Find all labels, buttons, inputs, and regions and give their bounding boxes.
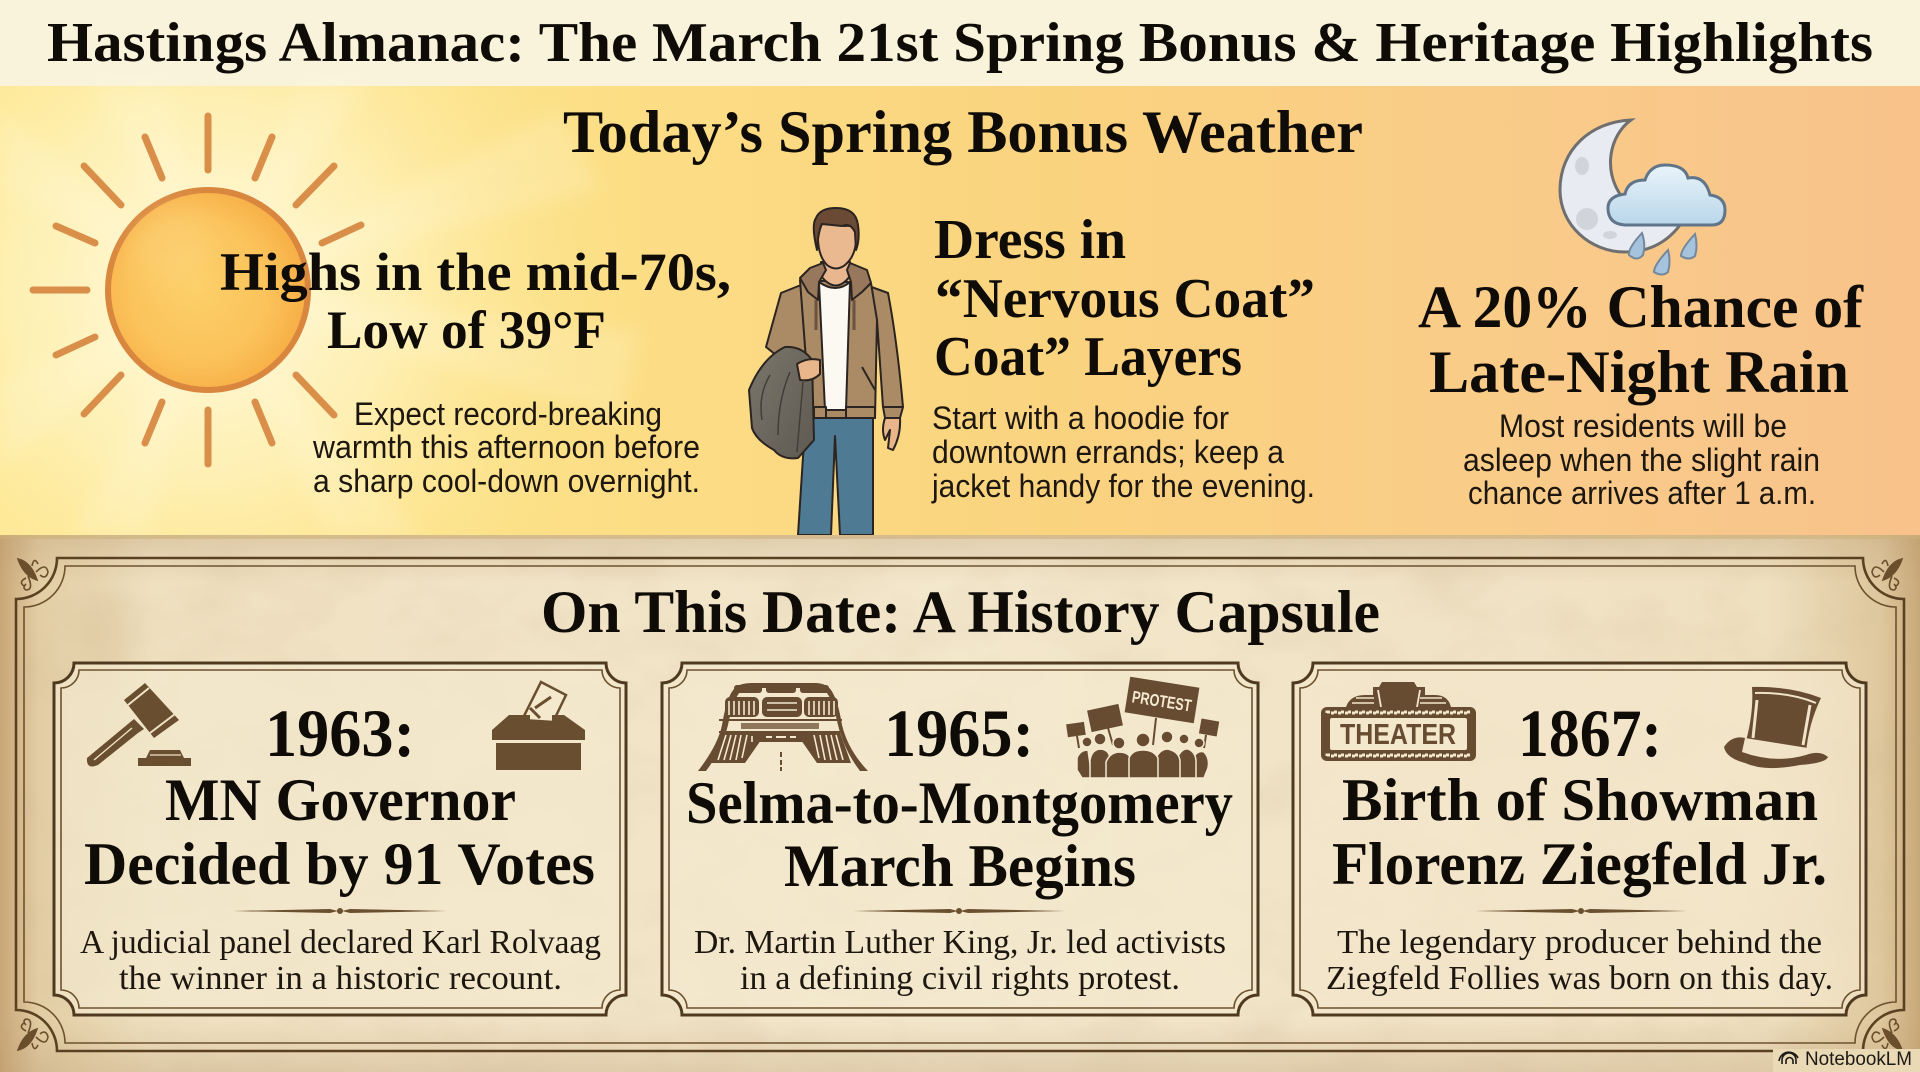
card 1 headline: MN Governor — [165, 767, 516, 833]
card 1 divider — [233, 908, 447, 914]
card 3 description: Ziegfeld Follies was born on this day. — [1326, 960, 1833, 997]
rain text block: A 20% Chance of — [1418, 274, 1864, 340]
NotebookLM watermark — [1773, 1049, 1920, 1072]
rain text block: chance arrives after 1 a.m. — [1468, 475, 1816, 511]
card 2 description: Dr. Martin Luther King, Jr. led activists — [694, 924, 1226, 961]
layers text block — [931, 209, 1315, 504]
icon: theater marquee — [1321, 682, 1476, 761]
history heading: On This Date: A History Capsule — [541, 579, 1380, 645]
card: 1867 — [1293, 663, 1866, 1015]
layers text block: “Nervous Coat” — [935, 268, 1315, 330]
temperature text block: a sharp cool-down overnight. — [313, 463, 700, 499]
temperature text block: Expect record-breaking — [354, 396, 662, 432]
panel: history capsule — [0, 535, 1920, 1072]
icon: Edmund Pettus bridge — [698, 683, 868, 771]
card 2 year: 1965: — [884, 695, 1034, 771]
card 3 headline — [1332, 767, 1827, 897]
card 2 divider — [853, 908, 1065, 914]
layers text block: Start with a hoodie for — [932, 400, 1229, 436]
card 2 frame — [662, 663, 1258, 1015]
card 2 headline: March Begins — [784, 833, 1136, 899]
card 3 description: The legendary producer behind the — [1337, 924, 1822, 961]
rain text block: Most residents will be — [1499, 408, 1787, 444]
icon: protest crowd — [1066, 677, 1219, 778]
card 1 year: 1963: — [265, 695, 415, 771]
title banner: Hastings Almanac: The March 21st Spring Bonus & Heritage Highlights — [47, 12, 1873, 74]
card 2 description — [694, 924, 1226, 997]
card 2 headline: Selma-to-Montgomery — [686, 770, 1233, 836]
card 3 headline: Birth of Showman — [1342, 767, 1818, 833]
rain text block: asleep when the slight rain — [1463, 442, 1820, 478]
parchment background — [0, 535, 1920, 1072]
card 1 headline: Decided by 91 Votes — [84, 831, 595, 897]
corner ornament: bottom left — [18, 1019, 48, 1050]
title banner — [0, 0, 1920, 86]
corner ornament: top left — [18, 559, 48, 590]
card 2 headline — [686, 770, 1233, 899]
card 1 headline — [84, 767, 595, 897]
protest sign: PROTEST — [1131, 687, 1193, 716]
weather heading: Today’s Spring Bonus Weather — [563, 99, 1363, 165]
corner ornament: top right — [1872, 559, 1902, 590]
rain text block — [1418, 274, 1864, 511]
temperature text block: Highs in the mid-70s, — [220, 242, 731, 302]
weather panel background — [0, 86, 1920, 536]
card: 1963 — [54, 663, 626, 1015]
card 1 description: A judicial panel declared Karl Rolvaag — [80, 924, 601, 961]
card 3 headline: Florenz Ziegfeld Jr. — [1332, 831, 1827, 897]
icon: ballot box — [492, 682, 585, 770]
card: 1965 — [662, 663, 1258, 1015]
layers text block: downtown errands; keep a — [932, 434, 1284, 470]
card 3 year: 1867: — [1518, 695, 1662, 771]
layers text block: Coat” Layers — [934, 326, 1242, 388]
card 3 divider — [1475, 908, 1687, 914]
icon: theater marquee: THEATER — [1340, 719, 1456, 751]
layers text block: Dress in — [934, 209, 1126, 271]
temperature text block: Low of 39°F — [327, 300, 606, 360]
icon: top hat — [1724, 687, 1828, 768]
NotebookLM watermark: NotebookLM — [1805, 1049, 1912, 1070]
card 3 frame — [1293, 663, 1866, 1015]
rain text block: Late-Night Rain — [1429, 339, 1849, 405]
card 1 description: the winner in a historic recount. — [119, 960, 562, 997]
panel: spring bonus weather — [0, 86, 1920, 536]
temperature text block — [220, 242, 731, 499]
layers text block: jacket handy for the evening. — [931, 468, 1315, 504]
temperature text block: warmth this afternoon before — [312, 429, 700, 465]
icon: sun — [33, 116, 361, 464]
corner ornament: bottom right — [1872, 1019, 1902, 1050]
card 1 frame — [54, 663, 626, 1015]
icon: crescent moon with rain cloud — [1560, 120, 1725, 274]
card 2 description: in a defining civil rights protest. — [740, 960, 1180, 997]
card 1 description — [80, 924, 601, 997]
icon: gavel — [87, 683, 191, 766]
card 3 description — [1326, 924, 1833, 997]
icon: person in hoodie holding a coat — [749, 208, 903, 535]
outer ornamental frame — [16, 558, 1904, 1051]
